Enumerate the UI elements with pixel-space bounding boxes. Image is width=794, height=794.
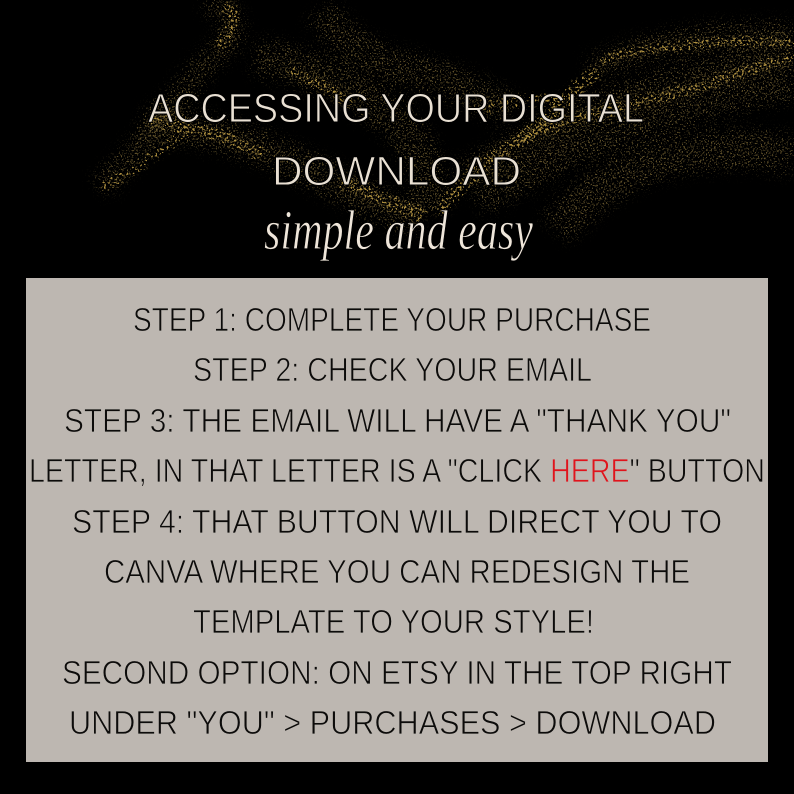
step instructions text: STEP 2: CHECK YOUR EMAIL bbox=[193, 351, 592, 388]
title: accessing your digital download bbox=[148, 85, 644, 194]
panel: steps background bbox=[26, 278, 768, 762]
step instructions text bbox=[29, 301, 765, 741]
title: accessing your digital download: ACCESSING YOUR DIGITAL bbox=[148, 85, 644, 131]
gold dotted wave background bbox=[100, 0, 794, 230]
step instructions text: STEP 3: THE EMAIL WILL HAVE A "THANK YOU" bbox=[64, 402, 731, 439]
step instructions text: STEP 1: COMPLETE YOUR PURCHASE bbox=[133, 301, 651, 338]
step instructions text: LETTER, IN THAT LETTER IS A "CLICK HERE" BUTTON bbox=[29, 452, 765, 489]
title: accessing your digital download: DOWNLOAD bbox=[272, 148, 521, 194]
step instructions text: SECOND OPTION: ON ETSY IN THE TOP RIGHT bbox=[62, 654, 732, 691]
step instructions text: CANVA WHERE YOU CAN REDESIGN THE bbox=[104, 553, 690, 590]
step instructions text: UNDER "YOU" > PURCHASES > DOWNLOAD bbox=[69, 704, 716, 741]
step instructions text: STEP 4: THAT BUTTON WILL DIRECT YOU TO bbox=[72, 503, 722, 540]
step instructions text: TEMPLATE TO YOUR STYLE! bbox=[193, 603, 594, 640]
subtitle: simple and easy: simple and easy bbox=[264, 200, 533, 262]
